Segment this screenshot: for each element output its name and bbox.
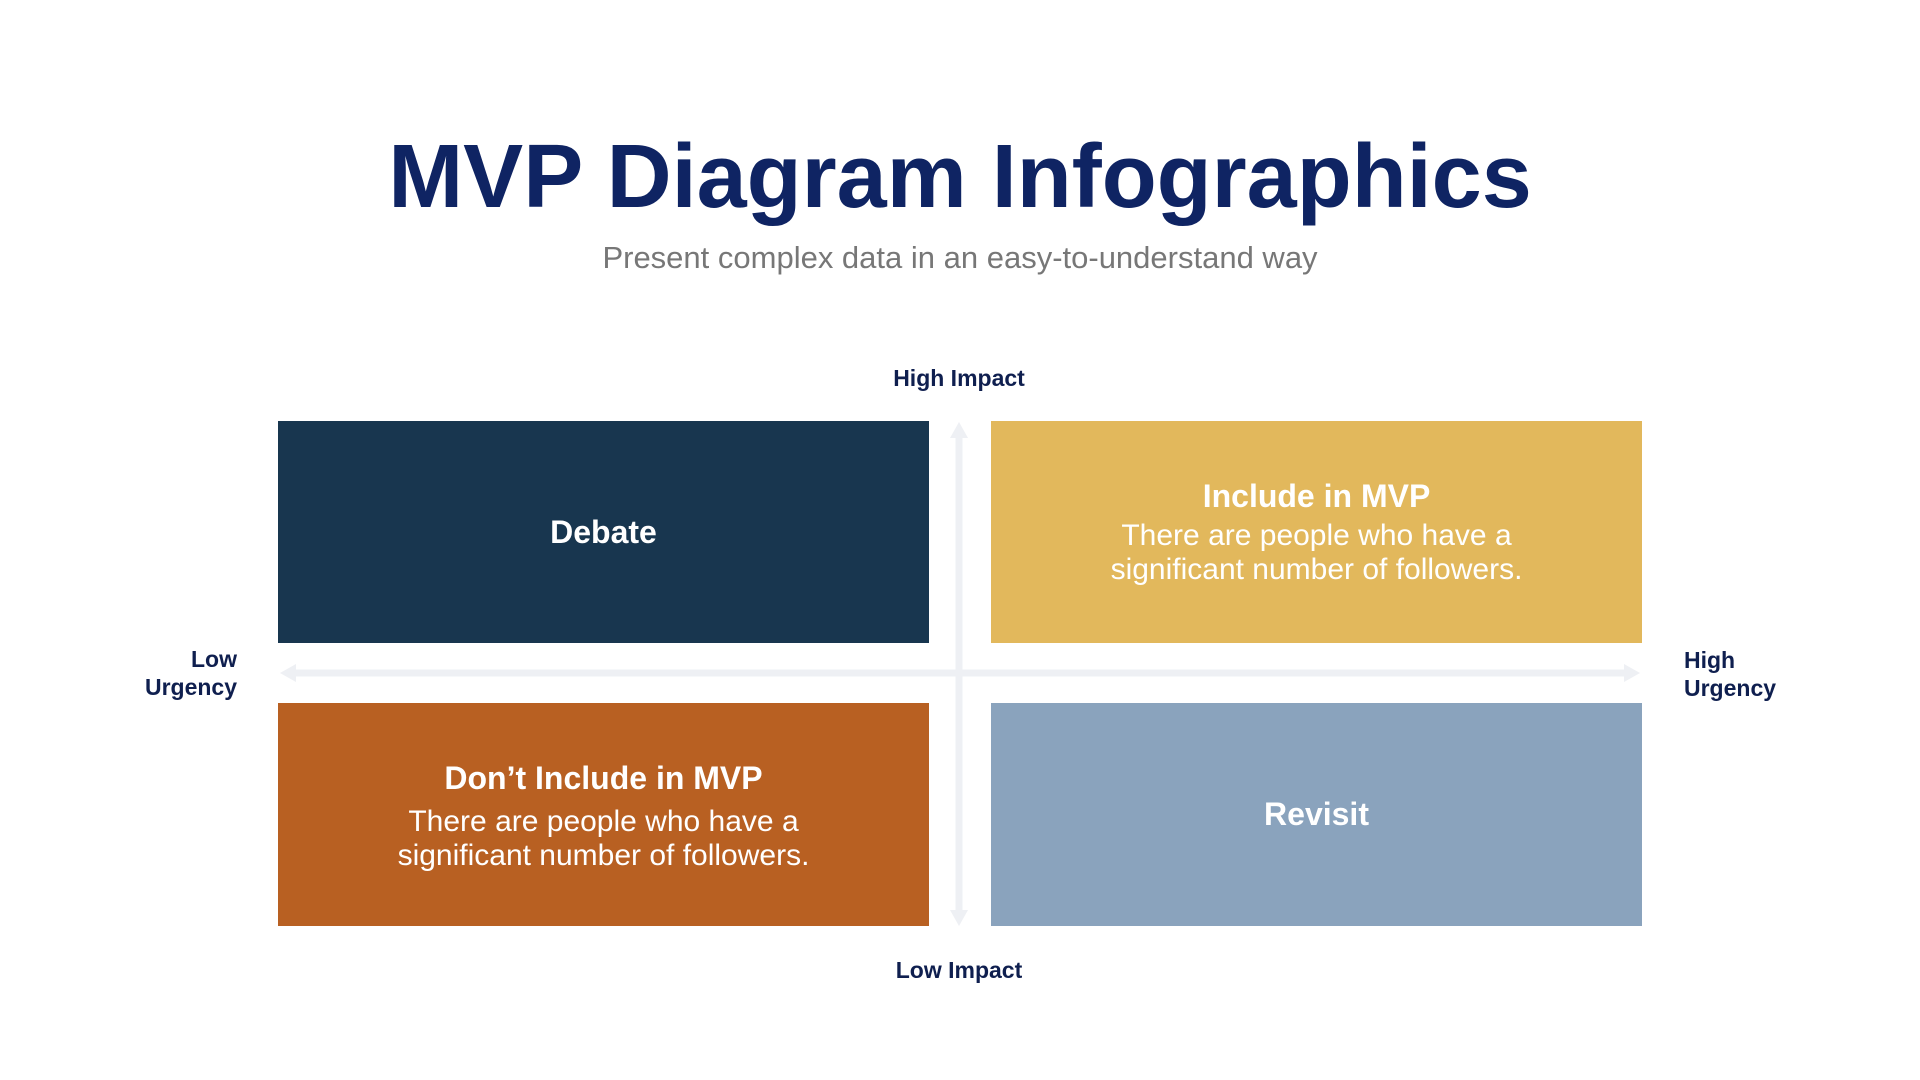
subtitle: Present complex data in an easy-to-understand way [602,240,1318,275]
panel: include in MVP: There are people who have a [1121,518,1512,552]
panel: debate: Debate [550,514,657,550]
panel: don't include: Don’t Include in MVP [444,760,763,796]
label: high urgency [1684,647,1776,701]
panel: don't include [278,703,929,926]
panel: include in MVP: Include in MVP [1203,478,1430,514]
panel: debate [278,421,929,643]
panel: include in MVP [991,421,1642,643]
label: low urgency: Low [191,646,237,672]
label: high urgency: Urgency [1684,675,1776,701]
label: low impact: Low Impact [896,957,1022,983]
label: low urgency [145,646,237,700]
panel: don't include: significant number of followers. [398,839,809,872]
panel: revisit: Revisit [1264,796,1369,832]
title: MVP Diagram Infographics [388,127,1532,227]
panel: revisit [991,703,1642,926]
label: low urgency: Urgency [145,674,237,700]
panel: don't include: There are people who have a [408,805,799,838]
label: high impact: High Impact [893,365,1025,391]
label: high urgency: High [1684,647,1735,673]
panel: include in MVP: significant number of followers. [1111,552,1522,586]
